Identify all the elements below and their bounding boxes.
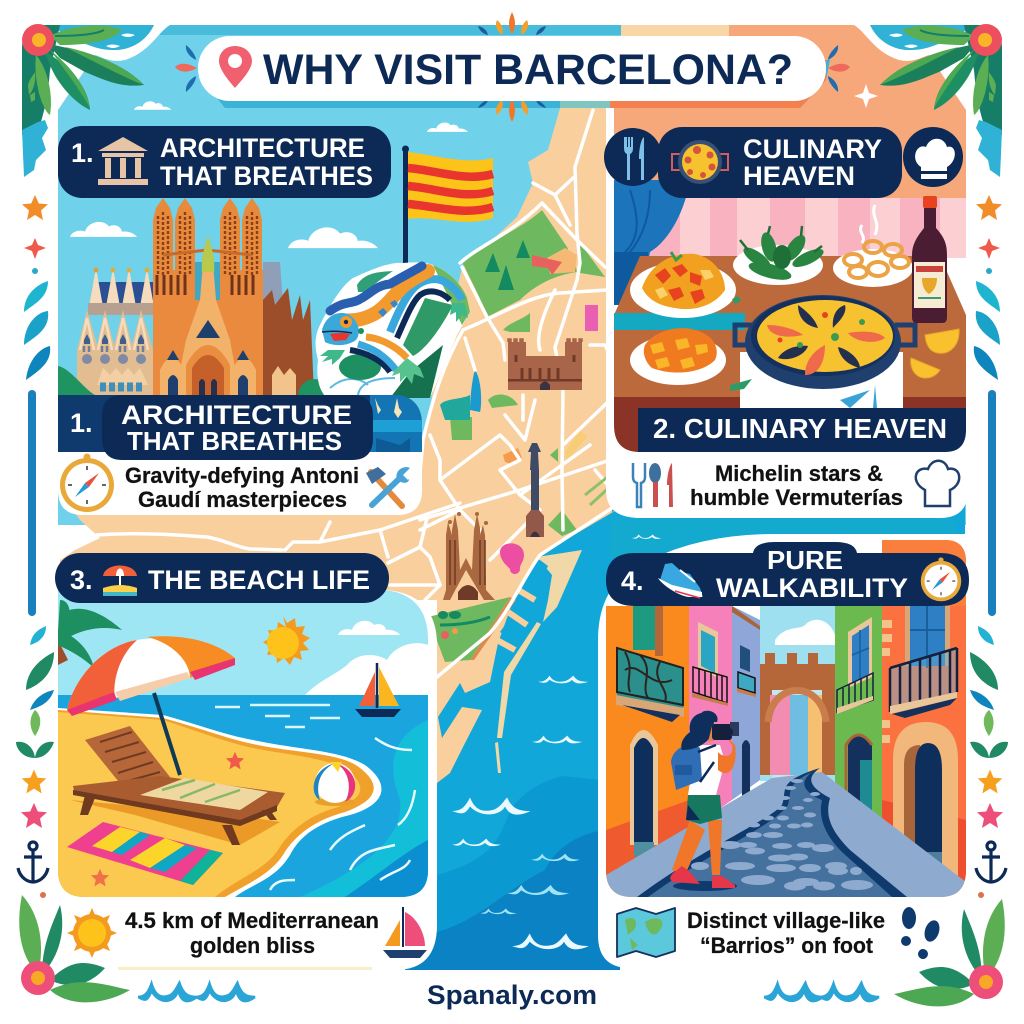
- land: [60, 108, 625, 783]
- icon: folded map: [617, 908, 675, 957]
- top header: THAT BREATHES: [160, 161, 373, 191]
- top header: ARCHITECTURE: [160, 133, 365, 163]
- caption text: Gaudí masterpieces: [138, 487, 347, 512]
- icon: small Sagrada Familia on map: [443, 512, 495, 600]
- panel 2: culinary heaven: [604, 100, 970, 518]
- table: [614, 256, 966, 397]
- caption text: Michelin stars &: [715, 461, 883, 486]
- plates and food: [630, 196, 959, 391]
- caption text: Distinct village-like: [687, 908, 885, 933]
- icon: paella pan: [672, 140, 728, 184]
- sea: [405, 500, 965, 970]
- icon: compass: [60, 454, 114, 512]
- icon: Columbus monument: [526, 443, 544, 537]
- wine bottle: [912, 196, 947, 323]
- bottom banner: ARCHITECTURE: [121, 400, 352, 430]
- lemons: [925, 329, 959, 353]
- icon: sailboat: [383, 907, 427, 958]
- caption text: [125, 908, 379, 958]
- icon: fork and knife: [624, 137, 644, 180]
- icon: chef hat: [915, 139, 955, 179]
- bottom banner: 1.: [70, 408, 93, 438]
- bottom banner: [638, 408, 966, 452]
- right buildings: [835, 606, 882, 818]
- photographer: [670, 711, 739, 891]
- bottom banner: [58, 395, 422, 460]
- sun lounger: [73, 726, 285, 845]
- illustration: [614, 100, 970, 453]
- bottom banner: 2. CULINARY HEAVEN: [653, 413, 947, 444]
- header: THE BEACH LIFE: [148, 565, 370, 595]
- port: [495, 550, 582, 773]
- header: 3.: [70, 565, 93, 595]
- Gaudi mosaic lizard: [316, 262, 470, 398]
- sailboat: [355, 663, 401, 717]
- cobbles: [691, 779, 873, 890]
- left buildings: [606, 606, 689, 897]
- caption text: [687, 908, 885, 958]
- icon: compass small: [921, 557, 961, 601]
- top header: HEAVEN: [743, 161, 855, 191]
- panel 4: pure walkability: [598, 534, 969, 968]
- decor: bottom-left leaves and flower: [19, 895, 130, 1002]
- footer website: Spanaly.com: [427, 980, 597, 1010]
- decor: top-left palm corner: [20, 24, 170, 185]
- street: [606, 772, 966, 897]
- sea waves: [452, 534, 662, 949]
- gate arch: [758, 653, 835, 780]
- top header: 1.: [71, 138, 94, 168]
- sand: [58, 708, 381, 897]
- title banner: WHY VISIT BARCELONA?: [263, 46, 793, 94]
- Catalan flag: [402, 146, 493, 263]
- illustration: [58, 590, 428, 900]
- caption text: Gravity-defying Antoni: [125, 463, 359, 488]
- header: WALKABILITY: [716, 573, 908, 603]
- panel 3: the beach life: [50, 553, 437, 970]
- top header: [58, 126, 391, 198]
- right door: [893, 722, 958, 880]
- header: PURE: [767, 545, 843, 575]
- icon: footprints: [901, 907, 942, 960]
- icon: location pin: [219, 46, 252, 88]
- top header: [604, 127, 963, 198]
- icon: tools: [366, 467, 410, 506]
- panel 1: architecture: [58, 126, 470, 515]
- decor: bottom-right leaves and flower: [894, 899, 1005, 1006]
- gothic side building: [77, 268, 155, 395]
- caption card: [58, 452, 422, 515]
- right balconies: [837, 648, 957, 718]
- small cloud near title: [134, 101, 171, 110]
- icon: sun: [67, 908, 117, 958]
- park and green areas: [428, 210, 605, 662]
- decor: bottom-right waves: [764, 982, 879, 1001]
- umbrella: [67, 636, 235, 775]
- caption text: “Barrios” on foot: [700, 933, 874, 958]
- decor: top-right palm corner: [854, 24, 1004, 185]
- palm: [58, 600, 122, 668]
- sparkle: [854, 84, 878, 108]
- balconies: [616, 648, 756, 722]
- title banner: [175, 12, 850, 122]
- starfish: [226, 752, 244, 769]
- decor: right column ornaments: [970, 195, 1008, 898]
- illustration: [606, 540, 966, 900]
- curtain: [614, 180, 686, 256]
- header: 4.: [621, 566, 644, 596]
- bottom banner: THAT BREATHES: [127, 426, 342, 456]
- header: [55, 553, 389, 603]
- decor: left column ornaments: [16, 195, 54, 898]
- icon: castle landmark: [508, 339, 582, 390]
- decorative petals: [175, 12, 850, 122]
- paella pan: [735, 295, 915, 389]
- icon: chef hat outline: [916, 461, 959, 506]
- caption text: 4.5 km of Mediterranean: [125, 908, 379, 933]
- caption text: humble Vermuterías: [690, 485, 903, 510]
- top header: CULINARY: [743, 134, 882, 164]
- sun: [263, 616, 310, 665]
- caption text: [125, 463, 359, 512]
- header: [606, 542, 969, 606]
- caption text: golden bliss: [190, 933, 315, 958]
- towel: [67, 822, 223, 885]
- decor: bottom-left waves: [138, 982, 255, 1001]
- icon: temple: [98, 137, 148, 185]
- roads: [97, 110, 612, 677]
- icon: sneaker: [658, 563, 703, 598]
- caption text: [690, 461, 903, 510]
- small cloud: [427, 122, 468, 132]
- left door: [630, 730, 658, 845]
- icon: cutlery: [633, 463, 673, 507]
- map pin pink: [500, 543, 524, 574]
- icon: umbrella: [103, 566, 137, 596]
- beach ball: [314, 762, 355, 806]
- Sagrada Familia illustration: [58, 198, 340, 400]
